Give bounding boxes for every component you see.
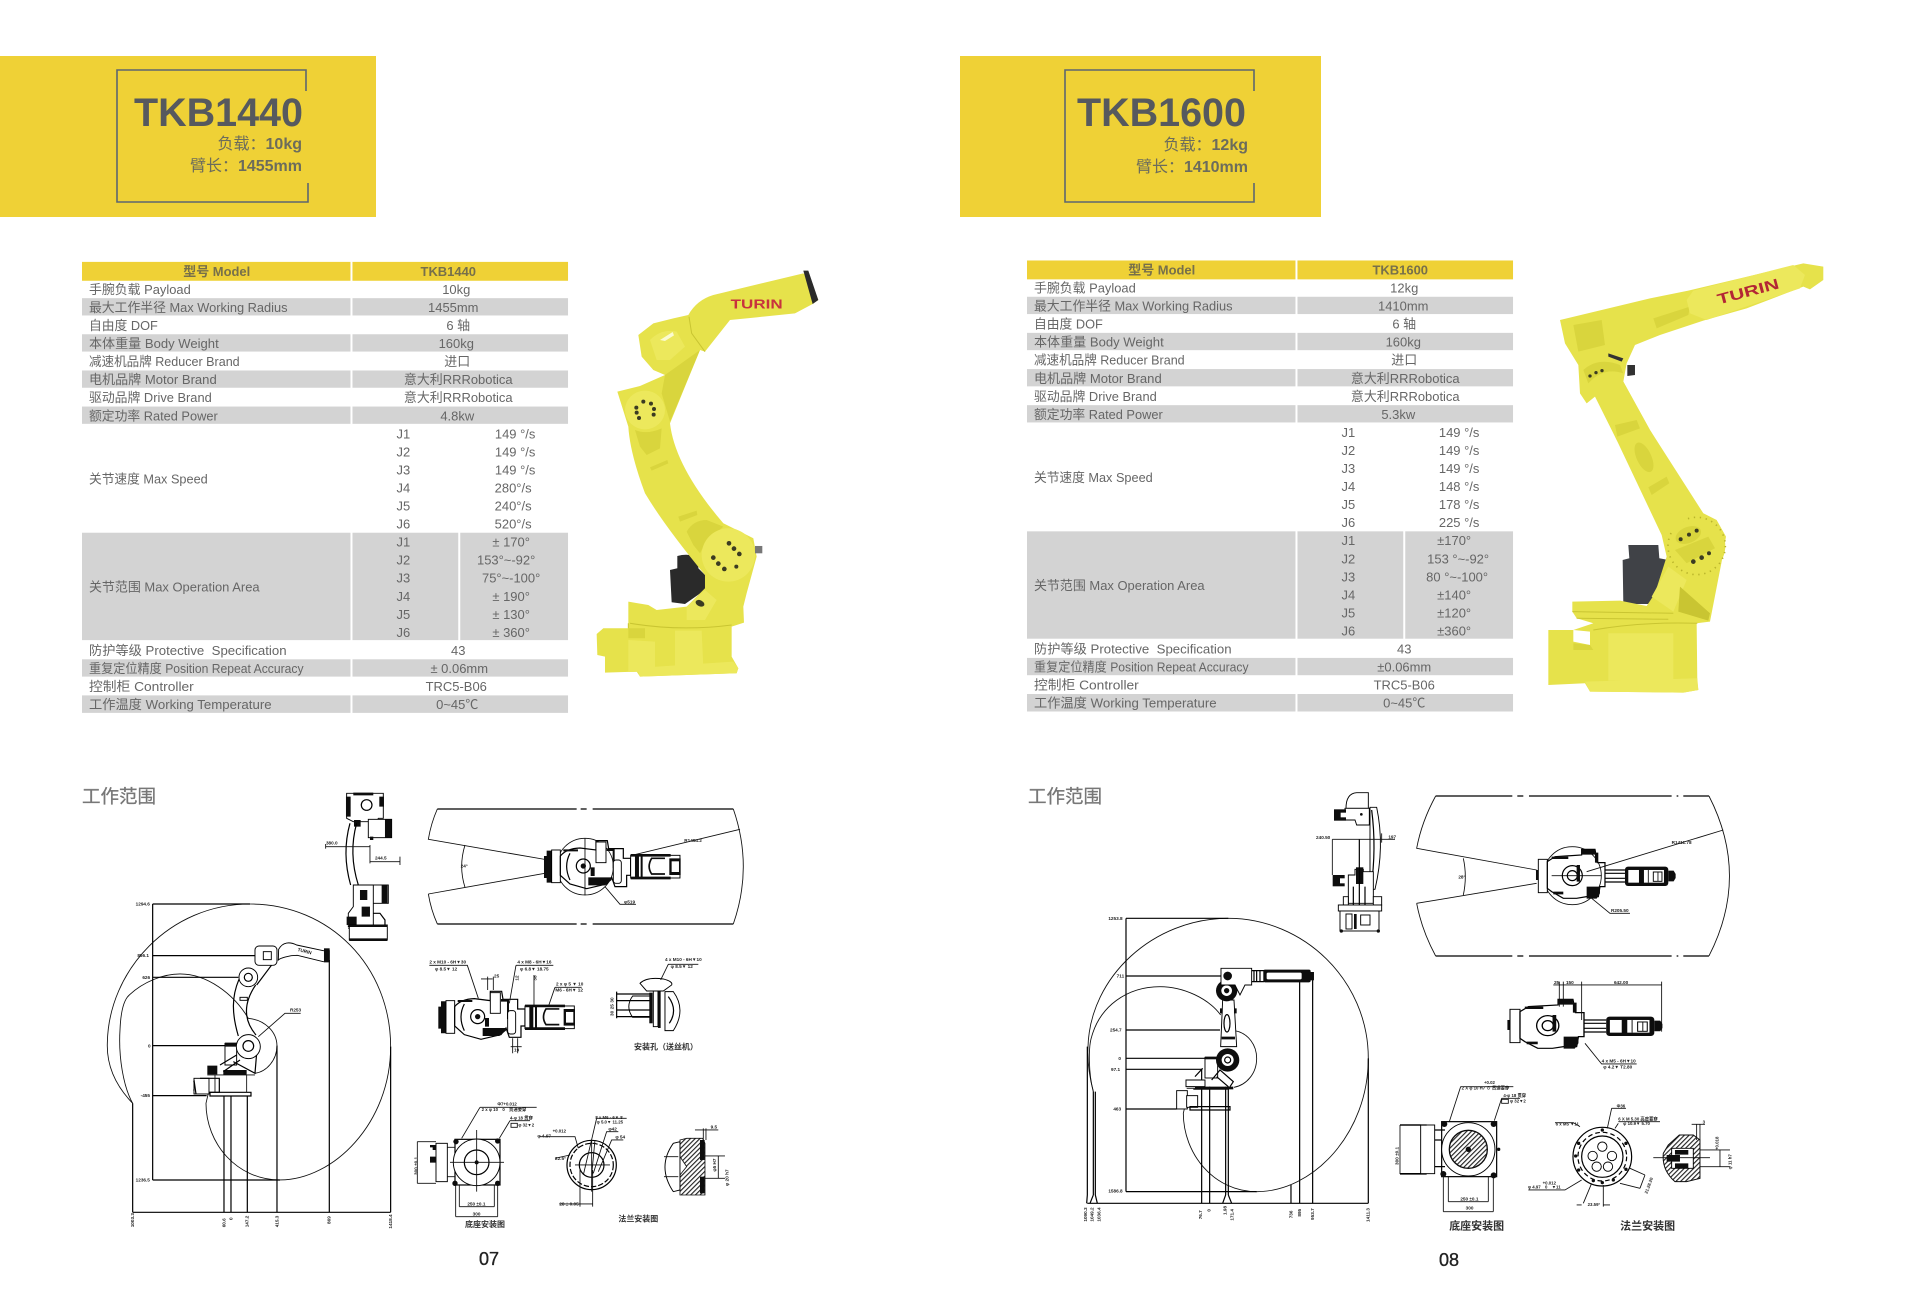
model banner: TKB1600: TKB1600	[1077, 91, 1246, 135]
model banner: TKB1600	[960, 56, 1321, 217]
drawing: top view with wrist mounting holes: 25	[494, 973, 500, 978]
spec table: TKB1600: J6	[1342, 624, 1355, 639]
drawing: flange mounting plan	[537, 1115, 658, 1224]
spec table: TKB1440: ± 0.06mm	[430, 661, 488, 676]
spec table: TKB1600	[1027, 260, 1513, 711]
spec table: TKB1440: 重复定位精度 Position Repeat Accuracy	[89, 661, 304, 676]
drawing: working envelope side view: 1236.5	[136, 1178, 150, 1183]
panel: page 08 TKB1600	[960, 56, 1823, 1270]
drawing: top view with rotation sector: R205.50	[1611, 908, 1629, 913]
spec table: TKB1440: 工作温度 Working Temperature	[89, 697, 272, 712]
drawing: base mounting plan: 底座安装图	[1449, 1218, 1504, 1232]
spec table: TKB1440: ± 130°	[492, 607, 530, 622]
drawing: base mounting plan: 4-φ 18 贯穿	[1503, 1092, 1527, 1099]
spec table: TKB1440: 0~45℃	[436, 697, 478, 712]
spec table: TKB1600: 自由度 DOF	[1034, 317, 1103, 332]
drawing: working envelope side view: -455	[141, 1093, 150, 1098]
drawing: working envelope side view: 1586.8	[1108, 1189, 1123, 1194]
spec table: TKB1600: 减速机品牌 Reducer Brand	[1034, 353, 1185, 368]
spec table: TKB1600: 本体重量 Body Weight	[1034, 335, 1164, 350]
spec table: TKB1440: 149 °/s	[495, 444, 535, 459]
spec table: TKB1600: 160kg	[1386, 335, 1421, 350]
spec table: TKB1600: 153 °~-92°	[1427, 551, 1489, 566]
spec table: TKB1440: J1	[397, 535, 410, 550]
drawing: top view with wrist mounting holes: φ 4.2▼ T2.80	[1603, 1064, 1633, 1069]
drawing: front view	[326, 793, 400, 941]
drawing: top view with wrist mounting holes: φ 6.8▼ 18.75	[520, 966, 549, 971]
spec table: TKB1440: J2	[397, 444, 410, 459]
drawing: working envelope side view: 147.2	[245, 1215, 250, 1227]
spec table: TKB1600: 12kg	[1390, 281, 1418, 295]
model banner: TKB1440: 臂长：1455mm	[190, 157, 302, 175]
spec table: TKB1440: ± 170°	[492, 535, 530, 550]
drawing: flange section	[664, 1125, 729, 1195]
spec table: TKB1600: J2	[1342, 443, 1355, 458]
drawing: flange mounting plan: 23.59°	[1588, 1202, 1600, 1207]
drawing: flange mounting plan: 28 ± 0.05	[559, 1201, 579, 1206]
drawing: wire feeder mounting holes: 30	[609, 1010, 614, 1016]
spec table: TKB1440: J6	[397, 517, 410, 532]
drawing: top view with wrist mounting holes	[1507, 980, 1662, 1069]
drawing: top view with wrist mounting holes: 4 x M5 - 6H▼10	[1602, 1059, 1636, 1064]
drawing: front view: 380.0	[326, 840, 338, 845]
drawing: base mounting plan: 300 ±0.1	[413, 1156, 418, 1175]
spec table: TKB1440: 75°~-100°	[482, 571, 540, 586]
spec table: TKB1440: J4	[397, 589, 410, 604]
spec table: TKB1600: 80 °~-100°	[1426, 569, 1488, 584]
spec table: TKB1440: 意大利RRRobotica	[404, 372, 513, 387]
drawing: working envelope side view: 1253.8	[1108, 916, 1123, 921]
drawing: base mounting plan: 2 x φ 10 0 贯通要穿	[482, 1106, 527, 1113]
drawing: flange mounting plan: φ 5.0▼ 11.25	[597, 1120, 624, 1125]
drawing: base mounting plan: 250 ±0.1	[467, 1201, 486, 1206]
spec table: TKB1440: 关节范围 Max Operation Area	[89, 580, 260, 594]
spec table: TKB1600: 型号 Model	[1128, 262, 1195, 277]
spec table: TKB1600: TKB1600	[1373, 262, 1428, 277]
drawing: working envelope side view: 1049.2	[1090, 1207, 1095, 1222]
spec table: TKB1600: 0~45℃	[1383, 696, 1425, 711]
spec table: TKB1440: J3	[397, 571, 410, 586]
heading: 工作范围: 工作范围	[1028, 786, 1102, 807]
drawing: front view	[1316, 793, 1397, 933]
drawing: flange mounting plan: Ф36	[1617, 1104, 1626, 1109]
spec table: TKB1440: 10kg	[442, 282, 470, 297]
drawing: working envelope side view: 0	[148, 1043, 151, 1048]
drawing: working envelope side view: 415.3	[274, 1215, 279, 1227]
spec table: TKB1440: 进口	[444, 354, 470, 369]
spec table: TKB1440: 控制柜 Controller	[89, 679, 195, 694]
drawing: working envelope side view: 0	[1118, 1056, 1121, 1061]
page number 07: 07	[479, 1249, 499, 1269]
spec table: TKB1440: 520°/s	[495, 517, 532, 532]
drawing: base mounting plan	[413, 1101, 537, 1229]
spec table: TKB1440: 4.8kw	[440, 408, 475, 423]
spec table: TKB1440: J5	[397, 499, 410, 514]
spec table: TKB1600: 防护等级 Protective Specification	[1034, 642, 1232, 657]
spec table: TKB1440: 43	[451, 643, 465, 658]
drawing: flange section: 9.5	[711, 1125, 718, 1130]
spec table: TKB1440: TKB1440	[421, 264, 476, 279]
spec table: TKB1600: 额定功率 Rated Power	[1034, 407, 1163, 422]
spec table: TKB1600: 电机品牌 Motor Brand	[1034, 371, 1162, 386]
robot illustration: TKB1440	[597, 271, 818, 677]
drawing: working envelope side view: 711	[1117, 974, 1125, 979]
robot illustration: TKB1440: TURIN	[731, 298, 783, 312]
drawing: working envelope side view: 0	[228, 1217, 233, 1220]
drawing: working envelope side view	[107, 901, 393, 1229]
drawing: top view with rotation sector	[428, 809, 743, 924]
drawing: working envelope side view: R253	[290, 1008, 302, 1013]
spec table: TKB1440: 自由度 DOF	[89, 318, 158, 333]
drawing: top view with wrist mounting holes: 2 x φ 5 ▼ 10	[556, 982, 584, 987]
panel: page 07 TKB1440	[0, 56, 818, 1269]
spec table: TKB1600: ±140°	[1437, 587, 1471, 602]
drawing: base mounting plan: 250 ±0.1	[1460, 1197, 1479, 1202]
spec table: TKB1440: TRC5-B06	[426, 679, 487, 694]
spec table: TKB1600: J1	[1342, 425, 1355, 440]
model banner: TKB1440: TKB1440	[134, 91, 303, 135]
spec table: TKB1440: ± 190°	[492, 589, 530, 604]
drawing: working envelope side view: 463	[1113, 1107, 1122, 1112]
drawing: working envelope side view: 1411.3	[1366, 1208, 1371, 1222]
drawing: working envelope side view: 895	[1297, 1208, 1302, 1217]
spec table: TKB1600: 驱动品牌 Drive Brand	[1034, 389, 1157, 404]
drawing: flange section: +0.018	[1714, 1136, 1719, 1150]
page number 08: 08	[1439, 1250, 1459, 1270]
drawing: working envelope side view: 856.1	[137, 953, 149, 958]
drawing: flange mounting plan: 22.5°	[555, 1156, 566, 1161]
drawing: flange mounting plan: 21.28.20	[1644, 1176, 1654, 1194]
spec table: TKB1440: 153°~-92°	[477, 553, 535, 568]
spec table: TKB1440: J3	[397, 462, 410, 477]
drawing: left dimension of base	[1395, 1125, 1427, 1174]
spec table: TKB1600: 意大利RRRobotica	[1351, 371, 1460, 386]
spec table: TKB1600: 43	[1397, 642, 1411, 657]
drawing: base mounting plan: Ф7+0.012	[497, 1101, 517, 1106]
spec table: TKB1440: 149 °/s	[495, 426, 535, 441]
spec table: TKB1440: 防护等级 Protective Specification	[89, 643, 287, 658]
robot illustration: TKB1600	[1548, 263, 1823, 693]
drawing: flange mounting plan: φ 4.97 0 ▼11	[1528, 1185, 1561, 1190]
drawing: top view with wrist mounting holes: 38	[532, 975, 537, 981]
drawing: working envelope side view: 1294.6	[136, 901, 150, 906]
spec table: TKB1440: J5	[397, 607, 410, 622]
drawing: base mounting plan	[1400, 1080, 1527, 1232]
drawing: working envelope side view: 0	[1207, 1209, 1212, 1212]
spec table: TKB1600: 关节速度 Max Speed	[1034, 470, 1153, 485]
drawing: top view with rotation sector: 24°	[461, 863, 468, 868]
drawing: working envelope side view: 626	[142, 975, 151, 980]
drawing: top view with wrist mounting holes: φ 8.5▼ 12	[435, 966, 458, 971]
spec table: TKB1440: 240°/s	[495, 499, 532, 514]
drawing: base mounting plan: 2 X φ 10 H7 ⊙ 贯通要穿	[1462, 1085, 1510, 1092]
spec table: TKB1440: J2	[397, 553, 410, 568]
drawing: wire feeder mounting holes: 安装孔（送丝机）	[634, 1041, 698, 1051]
drawing: front view: 244.5	[375, 856, 387, 861]
spec table: TKB1440: J1	[397, 426, 410, 441]
drawing: top view with wrist mounting holes: 2 x M10 - 6H▼30	[429, 960, 466, 965]
drawing: wire feeder mounting holes: 25	[609, 1004, 614, 1009]
drawing: top view with rotation sector: R1454.2	[684, 838, 702, 843]
heading: 工作范围: 工作范围	[82, 786, 156, 807]
spec table: TKB1440: 驱动品牌 Drive Brand	[89, 390, 212, 405]
drawing: base mounting plan: φ 32▼2	[518, 1122, 535, 1127]
model banner: TKB1600: 臂长：1410mm	[1136, 158, 1248, 176]
drawing: flange section: φ5 H7	[712, 1158, 717, 1172]
drawing: working envelope side view: 76.7	[1198, 1210, 1203, 1219]
drawing: top view with wrist mounting holes: M6 - 6H▼ 12	[555, 988, 583, 993]
spec table: TKB1600: ±120°	[1437, 605, 1471, 620]
spec table: TKB1600: 重复定位精度 Position Repeat Accuracy	[1034, 660, 1249, 675]
spec table: TKB1600: J3	[1342, 461, 1355, 476]
spec table: TKB1440: 149 °/s	[495, 462, 535, 477]
drawing: wire feeder mounting holes: φ 8.5▼ 12	[671, 964, 693, 969]
drawing: working envelope side view: 1418.4	[388, 1214, 393, 1229]
drawing: flange mounting plan: +0.012	[1543, 1181, 1557, 1186]
drawing: wire feeder mounting holes: 4 x M10 - 6H▼10	[665, 957, 702, 962]
spec table: TKB1600: J2	[1342, 551, 1355, 566]
drawing: wire feeder mounting holes: 30	[609, 997, 614, 1003]
drawing: working envelope side view: 1036.4	[1096, 1207, 1101, 1222]
drawing: working envelope side view	[1083, 916, 1371, 1222]
spec table: TKB1600: ±0.06mm	[1377, 660, 1431, 675]
drawing: flange mounting plan	[1528, 1104, 1675, 1232]
spec table: TKB1440: 1455mm	[428, 300, 478, 315]
spec table: TKB1600: 进口	[1391, 353, 1417, 368]
drawing: base mounting plan: +0.02	[1484, 1080, 1496, 1085]
drawing: base mounting plan: 底座安装图	[465, 1219, 505, 1229]
drawing: front view: 197	[1388, 835, 1397, 840]
spec table: TKB1600: 178 °/s	[1439, 497, 1479, 512]
drawing: flange mounting plan: 法兰安装图	[618, 1214, 658, 1224]
spec table: TKB1600: 149 °/s	[1439, 425, 1479, 440]
spec table: TKB1440: ± 360°	[492, 625, 530, 640]
drawing: working envelope side view: 1.98	[1223, 1205, 1228, 1215]
drawing: front view: 240.50	[1316, 835, 1331, 840]
drawing: top view with rotation sector: 28°	[1458, 874, 1465, 879]
spec table: TKB1440: 最大工作半径 Max Working Radius	[89, 300, 288, 315]
drawing: working envelope side view: 1090.3	[1083, 1207, 1088, 1222]
spec table: TKB1600: J3	[1342, 569, 1355, 584]
spec table: TKB1440: 280°/s	[495, 480, 532, 495]
drawing: flange mounting plan: φ 4.97	[537, 1133, 551, 1138]
drawing: top view with rotation sector	[1417, 796, 1729, 956]
drawing: flange mounting plan: +0.012	[553, 1129, 567, 1134]
robot illustration: TKB1600: TURIN	[1716, 277, 1781, 308]
spec table: TKB1600: TRC5-B06	[1374, 678, 1435, 693]
spec table: TKB1440: 额定功率 Rated Power	[89, 408, 218, 423]
spec table: TKB1600: J4	[1342, 587, 1355, 602]
drawing: top view with wrist mounting holes: 19	[514, 1047, 520, 1052]
drawing: working envelope side view: 1003.3	[130, 1213, 135, 1227]
drawing: working envelope side view: 869	[327, 1216, 332, 1224]
spec table: TKB1600: 控制柜 Controller	[1034, 678, 1140, 693]
spec table: TKB1600: 225 °/s	[1439, 515, 1479, 530]
spec table: TKB1440: 6 轴	[446, 318, 470, 333]
spec table: TKB1440: 本体重量 Body Weight	[89, 336, 219, 351]
drawing: top view with wrist mounting holes: 25	[1554, 980, 1560, 985]
drawing: working envelope side view: 254.7	[1110, 1028, 1122, 1033]
drawing: flange section: φ 20 h7	[724, 1169, 729, 1186]
spec table: TKB1440: 手腕负载 Payload	[89, 282, 191, 297]
spec table: TKB1600: 最大工作半径 Max Working Radius	[1034, 299, 1233, 313]
spec table: TKB1600: ±170°	[1437, 533, 1471, 548]
drawing: left dimension of base: 300 ±0.1	[1395, 1146, 1400, 1165]
drawing: top view with wrist mounting holes: 642.00	[1614, 980, 1629, 985]
drawing: working envelope side view: 953.7	[1310, 1208, 1315, 1220]
drawing: flange mounting plan: 6 x M5 ▼11	[1556, 1121, 1580, 1126]
spec table: TKB1600: 148 °/s	[1439, 479, 1479, 494]
model banner: TKB1440	[0, 56, 376, 217]
drawing: working envelope side view: 736	[1288, 1210, 1293, 1218]
spec table: TKB1440: 减速机品牌 Reducer Brand	[89, 354, 240, 369]
drawing: working envelope side view: 171.4	[1230, 1209, 1235, 1221]
spec table: TKB1600: ±360°	[1437, 624, 1471, 639]
spec table: TKB1600: J5	[1342, 605, 1355, 620]
spec table: TKB1600: 工作温度 Working Temperature	[1034, 696, 1217, 711]
drawing: top view with wrist mounting holes	[429, 960, 584, 1053]
spec table: TKB1440: J6	[397, 625, 410, 640]
drawing: flange mounting plan: φ 54	[615, 1134, 626, 1139]
spec table: TKB1440: 关节速度 Max Speed	[89, 471, 208, 486]
drawing: flange mounting plan: 法兰安装图	[1620, 1218, 1675, 1232]
drawing: flange section	[1653, 1119, 1733, 1182]
spec table: TKB1600: 1410mm	[1378, 299, 1428, 313]
model banner: TKB1600: 负载：12kg	[1164, 136, 1248, 154]
spec table: TKB1600: 意大利RRRobotica	[1351, 389, 1460, 404]
spec table: TKB1600: J1	[1342, 533, 1355, 548]
spec table: TKB1440	[82, 262, 568, 713]
spec table: TKB1440: 型号 Model	[183, 264, 250, 279]
drawing: base mounting plan: 300	[473, 1211, 481, 1216]
spec table: TKB1600: J4	[1342, 479, 1355, 494]
spec table: TKB1600: 关节范围 Max Operation Area	[1034, 578, 1205, 593]
drawing: top view with wrist mounting holes: 150	[1566, 980, 1574, 985]
drawing: wire feeder mounting holes	[609, 957, 702, 1051]
spec table: TKB1440: J4	[397, 480, 410, 495]
drawing: flange mounting plan: φ 10.9▼ 5.70	[1623, 1121, 1651, 1126]
drawing: flange section: 3	[1703, 1119, 1706, 1124]
drawing: top view with wrist mounting holes: 12	[514, 975, 519, 981]
drawing: base mounting plan: φ 32▼2	[1510, 1098, 1526, 1103]
spec table: TKB1440: 电机品牌 Motor Brand	[89, 372, 217, 387]
drawing: flange mounting plan: 8 x M6 - 6▼ 8	[595, 1115, 623, 1120]
spec table: TKB1600: 149 °/s	[1439, 443, 1479, 458]
drawing: top view with wrist mounting holes: 4 x M8 - 6H▼16	[517, 960, 552, 965]
drawing: flange mounting plan: φ42	[608, 1126, 617, 1131]
spec table: TKB1600: J5	[1342, 497, 1355, 512]
spec table: TKB1440: 160kg	[439, 336, 474, 351]
drawing: working envelope side view: 60.6	[221, 1218, 226, 1227]
drawing: flange section: φ 11 h7	[1728, 1154, 1733, 1169]
spec table: TKB1600: 5.3kw	[1381, 407, 1416, 422]
drawing: top view with rotation sector: φ519	[624, 899, 635, 904]
spec table: TKB1600: 6 轴	[1392, 317, 1416, 332]
spec table: TKB1600: 手腕负载 Payload	[1034, 281, 1136, 295]
drawing: top view with rotation sector: R1411.78	[1672, 840, 1692, 845]
spec table: TKB1600: 149 °/s	[1439, 461, 1479, 476]
spec table: TKB1440: 意大利RRRobotica	[404, 390, 513, 405]
drawing: flange mounting plan: 6 X M 5.30 高度要穿	[1618, 1115, 1658, 1122]
spec table: TKB1600: J6	[1342, 515, 1355, 530]
drawing: working envelope side view: 97.1	[1111, 1067, 1120, 1072]
drawing: base mounting plan: 4-φ 18 贯穿	[510, 1114, 533, 1121]
model banner: TKB1440: 负载：10kg	[218, 135, 302, 153]
drawing: base mounting plan: 300	[1466, 1205, 1474, 1210]
drawing: working envelope side view: TURIN	[297, 947, 313, 956]
